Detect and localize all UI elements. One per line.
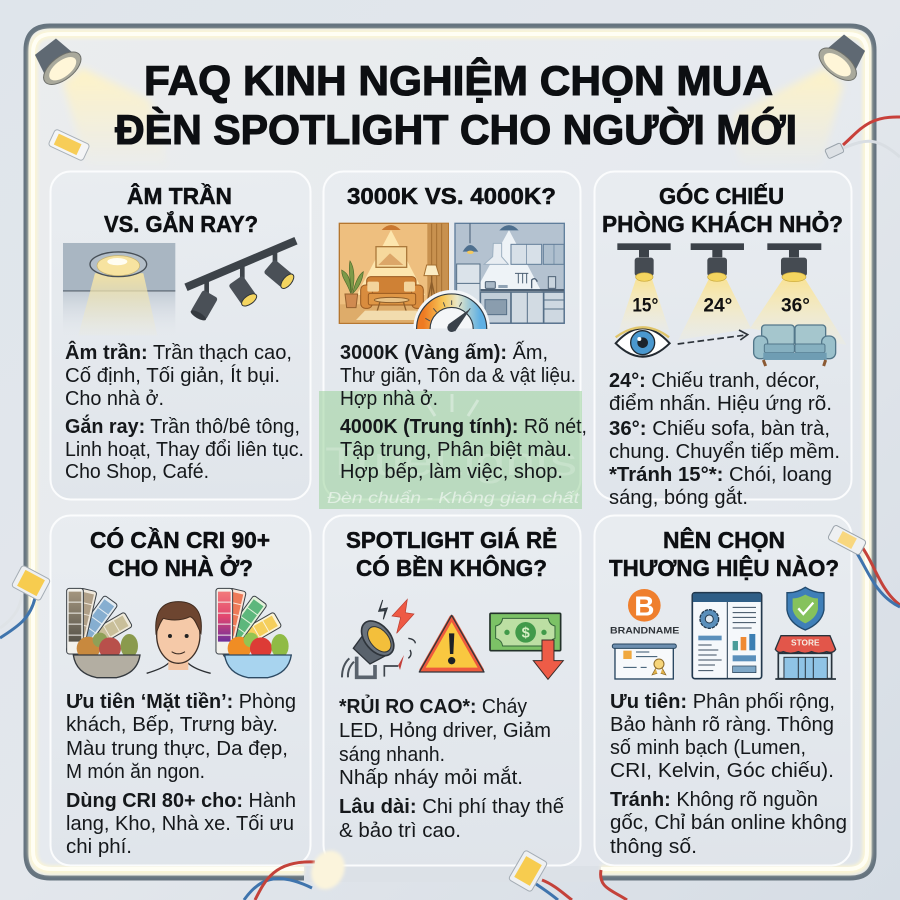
title	[115, 56, 797, 153]
heading: SPOTLIGHT GIÁ RẺ	[346, 525, 557, 553]
text block: sáng, bóng gắt.	[609, 486, 748, 509]
text block: Lâu dài: Chi phí thay thế	[339, 796, 564, 818]
icon: three beam angles: 36°	[781, 296, 810, 317]
icon: recessed downlight	[63, 243, 175, 335]
panel: 3000K vs 4000K	[319, 172, 587, 509]
text block	[66, 691, 296, 858]
icon: dull palette and fruit	[66, 588, 140, 678]
heading: THƯƠNG HIỆU NÀO?	[609, 554, 839, 581]
heading: CÓ BỀN KHÔNG?	[356, 554, 547, 581]
panel: thương hiệu	[594, 516, 852, 866]
text block: Tránh: Không rõ nguồn	[610, 789, 818, 811]
text block: chi phí.	[66, 836, 132, 858]
icon: person face	[147, 602, 211, 673]
text block: chung. Chuyển tiếp mềm.	[609, 441, 840, 463]
text block: gốc, Chỉ bán online không	[610, 812, 847, 834]
text block: Cố định, Tối giản, Ít bụi.	[65, 364, 280, 387]
heading	[346, 525, 557, 581]
text block: M món ăn ngon.	[66, 761, 205, 783]
text block: số minh bạch (Lumen,	[610, 737, 806, 759]
text block: Hợp bếp, làm việc, shop.	[340, 461, 563, 483]
text block: Màu trung thực, Da đẹp,	[66, 738, 288, 760]
illustration: warm living room	[339, 223, 448, 323]
watermark: Đèn chuẩn - Không gian chất	[327, 489, 580, 507]
panel: âm trần vs gắn ray	[50, 172, 310, 500]
title: ĐÈN SPOTLIGHT CHO NGƯỜI MỚI	[115, 105, 797, 153]
watermark	[319, 391, 582, 509]
icon: colour temperature gauge	[413, 290, 490, 332]
heading: PHÒNG KHÁCH NHỎ?	[602, 209, 843, 237]
text block: Cho Shop, Café.	[65, 461, 209, 483]
icon: store: STORE	[791, 638, 820, 648]
text block: khách, Bếp, Trưng bày.	[66, 714, 278, 736]
heading	[602, 182, 843, 237]
heading: ÂM TRẦN	[127, 182, 232, 209]
icon: sofa	[754, 325, 836, 366]
icon: track light	[186, 241, 296, 322]
text block: Bảo hành rõ ràng. Thông	[610, 714, 834, 736]
icon: banknote with down arrow	[490, 613, 563, 679]
icon: brand logo	[610, 589, 679, 635]
text block: Cho nhà ở.	[65, 388, 164, 410]
icon: store	[775, 636, 836, 679]
icon: three beam angles: 15°	[632, 296, 658, 317]
icon: broken spotlight	[342, 615, 415, 677]
text block	[609, 370, 840, 509]
icon: LED chip bottom centre with wires	[508, 850, 572, 900]
text block: điểm nhấn. Hiệu ứng rõ.	[609, 393, 832, 415]
heading: 3000K VS. 4000K?	[347, 183, 556, 209]
text block: Linh hoạt, Thay đổi liên tục.	[65, 439, 304, 461]
icon: LED chip top-left	[48, 129, 90, 161]
text block: sáng nhanh.	[339, 744, 445, 766]
panel: góc chiếu	[594, 172, 852, 509]
heading	[90, 526, 270, 581]
icon: red wire bottom right	[601, 870, 627, 900]
panel: spotlight giá rẻ	[324, 516, 580, 866]
icon: banknote with down arrow: $	[522, 626, 530, 642]
heading: VS. GẮN RAY?	[104, 210, 258, 237]
text block: 4000K (Trung tính): Rõ nét,	[340, 416, 587, 438]
heading	[609, 526, 839, 581]
heading	[104, 182, 258, 237]
text block: Dùng CRI 80+ cho: Hành	[66, 790, 296, 812]
icon: shield	[787, 587, 824, 630]
watermark: TrueLights	[325, 440, 577, 484]
text block: 3000K (Vàng ấm): Ấm,	[340, 341, 548, 364]
text block: 36°: Chiếu sofa, bàn trà,	[609, 418, 830, 440]
icon: top-right ceiling spotlight	[813, 29, 872, 87]
icon: vivid palette and fruit	[215, 588, 291, 678]
text block: LED, Hỏng driver, Giảm	[339, 720, 551, 742]
icon: brand logo: B	[634, 590, 654, 621]
icon: brand logo: BRANDNAME	[610, 625, 679, 635]
text block: & bảo trì cao.	[339, 820, 461, 842]
panel: CRI 90+	[50, 516, 310, 866]
title: FAQ KINH NGHIỆM CHỌN MUA	[144, 56, 773, 104]
text block: Hợp nhà ở.	[340, 388, 438, 410]
text block	[340, 341, 587, 483]
heading: GÓC CHIẾU	[659, 182, 784, 209]
text block: Gắn ray: Trần thô/bê tông,	[65, 414, 300, 438]
icon: certificate	[612, 644, 676, 679]
icon: LED chip right edge with wires	[827, 524, 900, 607]
icon: lightning bolts	[379, 599, 414, 633]
illustration: cool kitchen	[455, 223, 564, 323]
icon: glowing LED chip bottom with wires	[244, 845, 351, 900]
text block	[339, 694, 564, 842]
icon: three beam angles: 24°	[703, 296, 732, 317]
text block: Ưu tiên: Phân phối rộng,	[610, 691, 835, 713]
text block: *RỦI RO CAO*: Cháy	[339, 694, 527, 718]
heading: CÓ CẦN CRI 90+	[90, 526, 270, 553]
text block: CRI, Kelvin, Góc chiếu).	[610, 760, 834, 782]
icon: three beam angles	[617, 243, 847, 345]
arrow: eye to sofa	[678, 330, 748, 344]
icon: eye	[616, 327, 670, 357]
text block: Thư giãn, Tôn da & vật liệu.	[340, 365, 576, 387]
corner light beams	[63, 68, 843, 170]
text block: Âm trần: Trần thạch cao,	[65, 340, 292, 364]
text block: Nhấp nháy mỏi mắt.	[339, 766, 523, 789]
text block: Tập trung, Phân biệt màu.	[340, 439, 572, 461]
text block: Ưu tiên ‘Mặt tiền’: Phòng	[66, 691, 296, 713]
text block: thông số.	[610, 836, 697, 858]
icon: spec sheet	[692, 593, 762, 679]
icon: warning triangle	[419, 615, 484, 672]
icon: wires and connector top-right	[825, 117, 900, 159]
icon: top-left ceiling spotlight	[28, 33, 87, 91]
text block	[610, 691, 847, 858]
text block: 24°: Chiếu tranh, décor,	[609, 370, 820, 392]
heading: CHO NHÀ Ở?	[108, 553, 253, 581]
text block	[65, 340, 304, 483]
text block: lang, Kho, Nhà xe. Tối ưu	[66, 813, 294, 835]
heading: NÊN CHỌN	[663, 526, 785, 553]
text block: *Tránh 15°*: Chói, loang	[609, 464, 832, 486]
icon: LED chip left edge with wires	[0, 565, 51, 638]
